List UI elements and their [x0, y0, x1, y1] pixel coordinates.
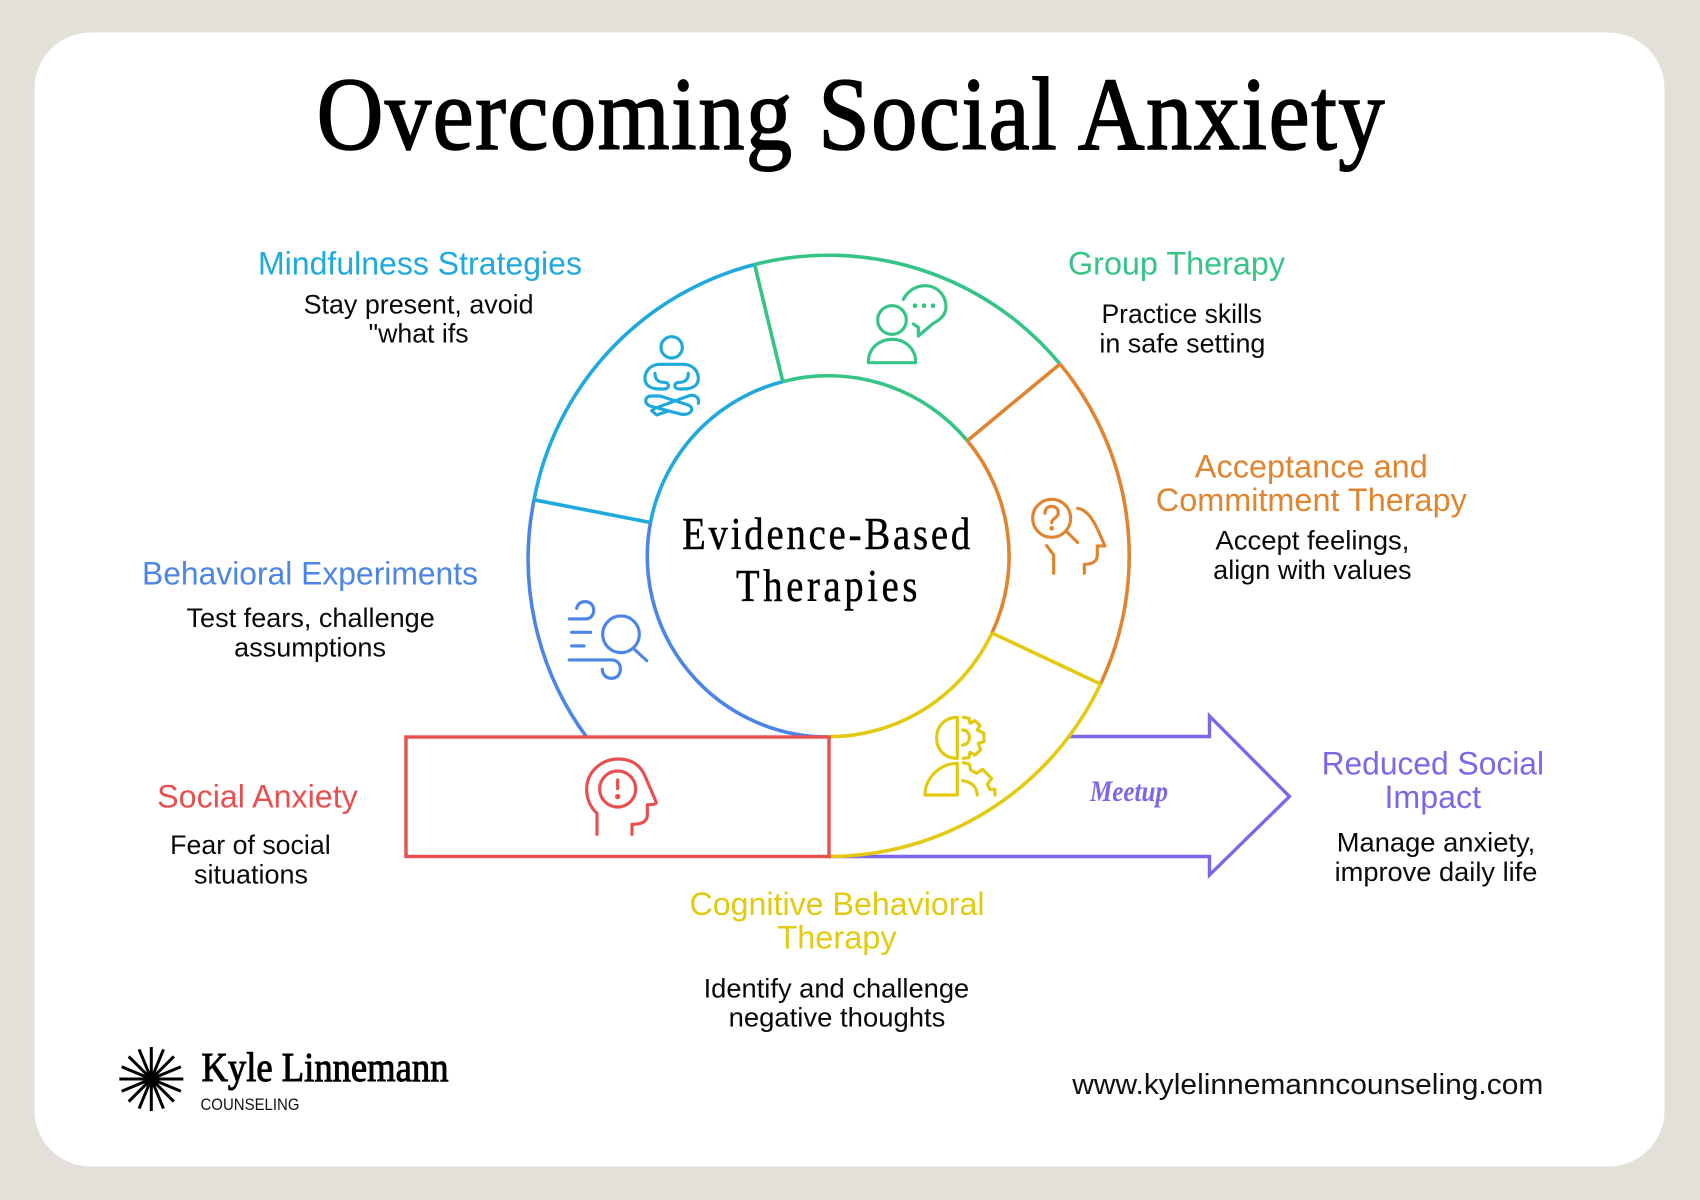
- label: social anxiety: Fear of social: [170, 830, 331, 860]
- website: www.kylelinnemanncounseling.com: [1071, 1069, 1543, 1101]
- icon: meetup wordmark: Meetup: [1089, 775, 1168, 808]
- logo: starburst mark: [119, 1047, 183, 1111]
- label: mindfulness strategies: Stay present, avoid: [304, 289, 534, 319]
- label: behavioral experiments: assumptions: [234, 632, 386, 662]
- center label: Evidence-Based: [682, 509, 970, 560]
- label: acceptance and commitment therapy: Acceptance and: [1195, 448, 1428, 484]
- segment: cognitive behavioral therapy: [829, 633, 1100, 856]
- icon: head with question magnifier: [1033, 499, 1105, 573]
- label: reduced social impact: Manage anxiety,: [1337, 828, 1535, 858]
- label: acceptance and commitment therapy: align with values: [1213, 555, 1412, 585]
- label: group therapy: in safe setting: [1099, 328, 1265, 358]
- label: cognitive behavioral therapy: Therapy: [777, 920, 897, 956]
- label: social anxiety: Social Anxiety: [157, 779, 358, 815]
- icon: magnifier and wind: [569, 602, 647, 678]
- title: Overcoming Social Anxiety: [317, 57, 1385, 172]
- icon: person with speech bubble: [868, 286, 946, 363]
- center label: [682, 509, 970, 612]
- label: behavioral experiments: Behavioral Experiments: [142, 555, 478, 591]
- label: mindfulness strategies: [258, 245, 582, 349]
- logo: wordmark: Kyle Linnemann: [202, 1044, 448, 1090]
- label: cognitive behavioral therapy: Identify and challenge: [704, 973, 969, 1003]
- label: reduced social impact: Impact: [1384, 779, 1481, 815]
- label: cognitive behavioral therapy: Cognitive Behavioral: [690, 886, 984, 922]
- segment: mindfulness strategies: [534, 264, 783, 522]
- label: behavioral experiments: Test fears, challenge: [186, 603, 435, 633]
- label: acceptance and commitment therapy: [1156, 448, 1467, 585]
- label: acceptance and commitment therapy: Commitment Therapy: [1156, 482, 1467, 518]
- box: social anxiety: [406, 737, 829, 856]
- label: social anxiety: [157, 779, 358, 889]
- logo: wordmark: COUNSELING: [200, 1095, 300, 1114]
- center label: Therapies: [736, 561, 917, 612]
- label: cognitive behavioral therapy: negative thoughts: [729, 1003, 945, 1033]
- label: social anxiety: situations: [194, 859, 308, 889]
- label: group therapy: [1068, 245, 1285, 358]
- label: reduced social impact: [1322, 746, 1544, 887]
- segment: behavioral experiments: [528, 500, 828, 737]
- segment: group therapy: [755, 255, 1060, 441]
- label: mindfulness strategies: Mindfulness Strategies: [258, 245, 582, 281]
- icon: head with alert: [587, 759, 656, 834]
- label: group therapy: Group Therapy: [1068, 245, 1285, 281]
- label: group therapy: Practice skills: [1102, 299, 1262, 329]
- arrow: reduced social impact: [829, 716, 1290, 875]
- label: acceptance and commitment therapy: Accept feelings,: [1215, 526, 1409, 556]
- ring diagram: [528, 255, 1129, 856]
- segment: acceptance and commitment therapy: [967, 364, 1129, 684]
- label: cognitive behavioral therapy: [690, 886, 984, 1033]
- icon: half heads and gears: [925, 717, 995, 795]
- label: behavioral experiments: [142, 555, 478, 662]
- logo: wordmark: [200, 1044, 448, 1114]
- label: reduced social impact: improve daily life: [1335, 857, 1537, 887]
- label: reduced social impact: Reduced Social: [1322, 746, 1544, 782]
- label: mindfulness strategies: "what ifs: [369, 319, 469, 349]
- icon: meditating person: [645, 337, 699, 415]
